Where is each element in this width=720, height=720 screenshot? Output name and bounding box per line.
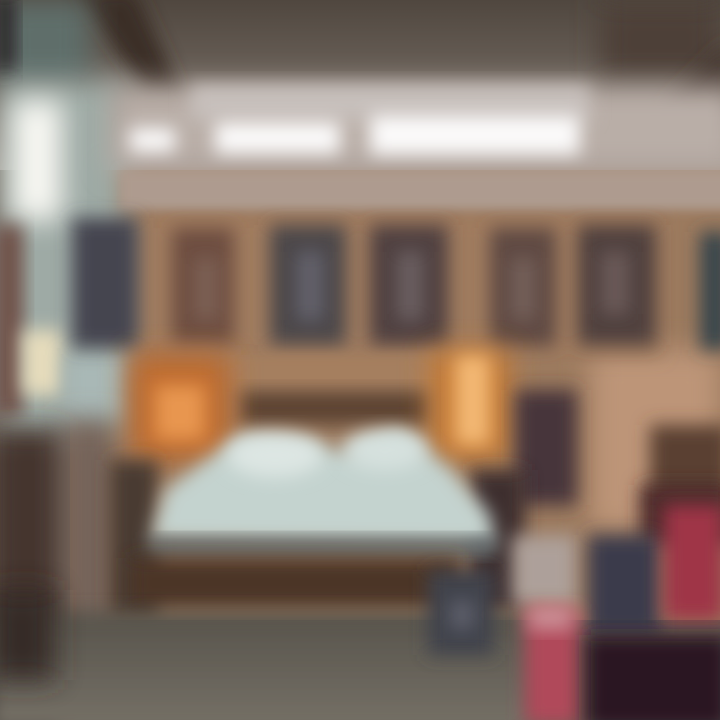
wall <box>70 170 720 620</box>
left lower column overlay <box>0 590 55 680</box>
armchair and cushions <box>512 425 720 720</box>
lamp: right <box>430 350 510 460</box>
bed <box>110 430 525 620</box>
lower right panel <box>515 390 577 505</box>
left window and dark column <box>0 80 125 720</box>
blurred heading blobs <box>130 115 580 155</box>
blue-gray stool <box>428 570 494 655</box>
ceiling <box>0 0 720 170</box>
wall panels <box>72 218 720 350</box>
beam <box>120 170 720 210</box>
floor <box>0 612 530 720</box>
headboard <box>225 355 445 424</box>
white header band <box>110 85 720 170</box>
lamp: left <box>130 355 230 460</box>
